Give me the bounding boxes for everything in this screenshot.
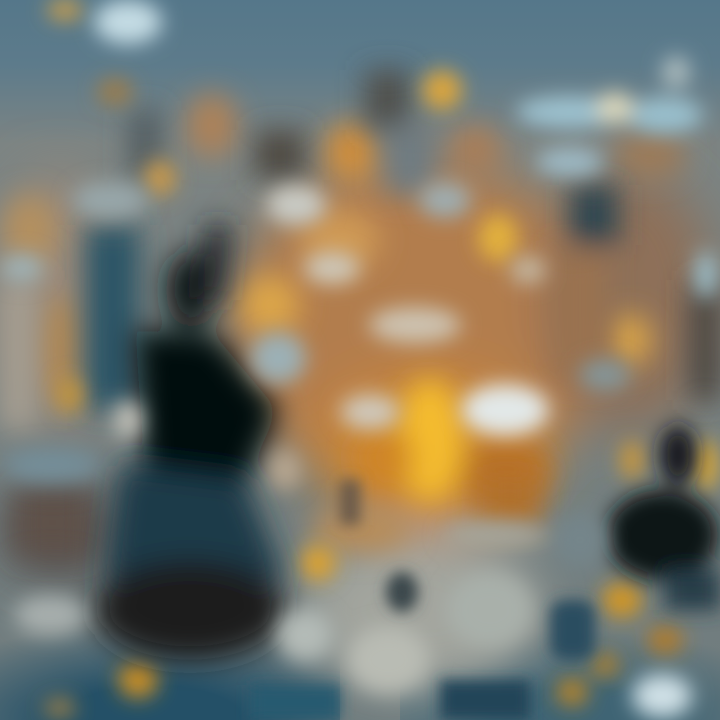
glowing centre light <box>2 93 686 552</box>
background tones <box>0 160 715 690</box>
dark foreground figure left <box>95 225 285 660</box>
dark accents in lower crowd <box>250 480 595 720</box>
dark foreground figure right <box>606 425 720 610</box>
pale towers and grey columns <box>0 70 720 555</box>
